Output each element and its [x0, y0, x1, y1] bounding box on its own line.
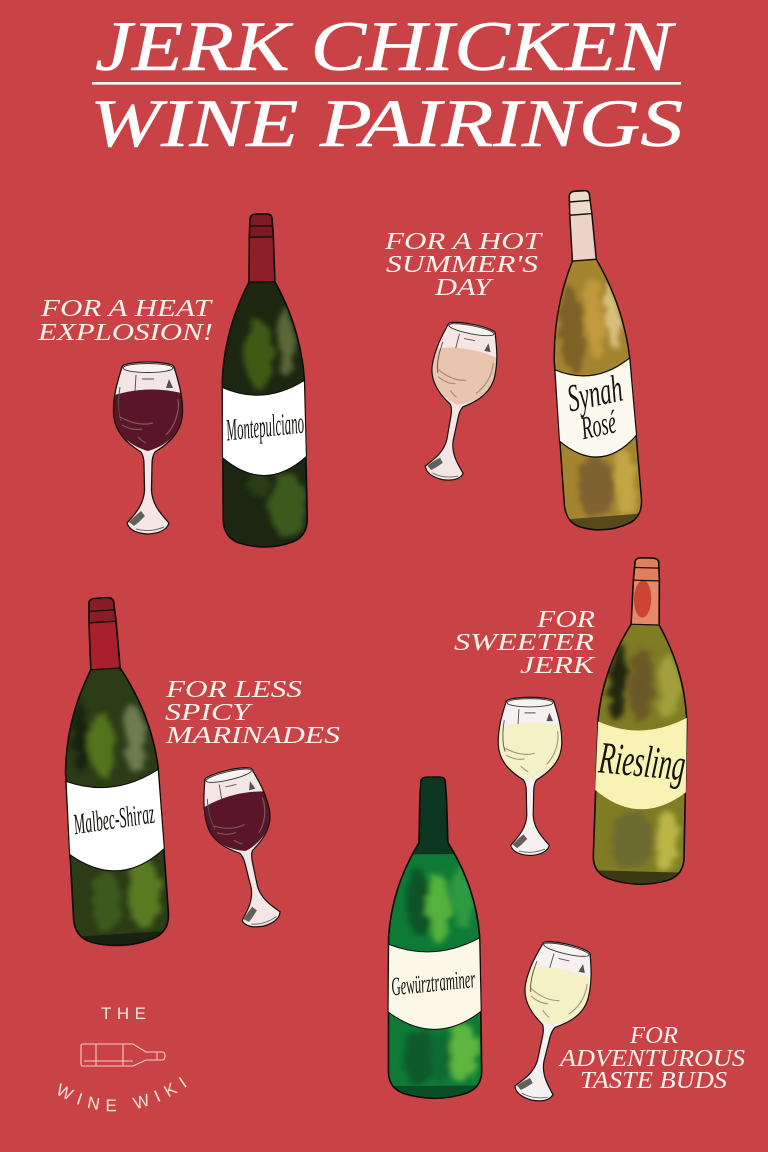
- caption: for adventurous taste buds: FOR: [629, 1023, 678, 1049]
- bottle: Riesling: [592, 557, 688, 885]
- bottle: Synah Rosé: Synah: [564, 366, 626, 420]
- title: WINE PAIRINGS: [90, 85, 683, 161]
- glass: white wine 2: [500, 937, 599, 1107]
- icon: bottle outline: [81, 1044, 165, 1066]
- text: Montepulciano: [224, 405, 305, 448]
- caption: for sweeter jerk: [454, 607, 597, 679]
- caption: for less spicy marinades: FOR LESS: [165, 677, 302, 703]
- caption: for a hot summer's day: DAY: [434, 275, 494, 301]
- bottle: Synah Rosé: Rosé: [577, 403, 620, 447]
- bottle: Synah Rosé: [554, 190, 642, 531]
- caption: for a heat explosion: FOR A HEAT: [40, 296, 213, 322]
- caption: for sweeter jerk: SWEETER: [454, 630, 594, 656]
- glass: rosé: [411, 318, 504, 486]
- glass: red wine 1: [113, 362, 183, 534]
- bottle: Riesling: Riesling: [596, 733, 688, 791]
- title: JERK CHICKEN: [95, 8, 676, 86]
- bottle: Gewürztraminer: [383, 777, 485, 1104]
- bottle: Montepulciano: [219, 213, 308, 548]
- caption: for adventurous taste buds: ADVENTUROUS: [558, 1046, 745, 1072]
- bottle: Malbec-Shiraz: Malbec-Shiraz: [71, 797, 157, 841]
- caption: for a heat explosion: EXPLOSION!: [37, 320, 213, 346]
- glass: white wine 1: [498, 697, 562, 855]
- caption: for a heat explosion: [37, 296, 213, 346]
- logo: The Wine Wiki: THE: [101, 1004, 152, 1023]
- bottle: Malbec-Shiraz: [64, 596, 170, 946]
- text: Gewürztraminer: [390, 965, 477, 1002]
- caption: for adventurous taste buds: [558, 1023, 745, 1094]
- caption: for less spicy marinades: SPICY: [165, 700, 254, 726]
- caption: for less spicy marinades: MARINADES: [165, 723, 340, 749]
- caption: for a hot summer's day: [384, 229, 543, 301]
- caption: for sweeter jerk: JERK: [520, 653, 597, 679]
- glass: red wine 2: [196, 763, 295, 933]
- caption: for a hot summer's day: SUMMER'S: [386, 252, 538, 278]
- logo: The Wine Wiki: [58, 1004, 187, 1112]
- caption: for a hot summer's day: FOR A HOT: [384, 229, 543, 255]
- logo: The Wine Wiki: WINE WIKI: [58, 1077, 187, 1112]
- caption: for sweeter jerk: FOR: [536, 607, 595, 633]
- caption: for adventurous taste buds: TASTE BUDS: [580, 1068, 727, 1094]
- caption: for less spicy marinades: [165, 677, 340, 749]
- title: [90, 8, 683, 161]
